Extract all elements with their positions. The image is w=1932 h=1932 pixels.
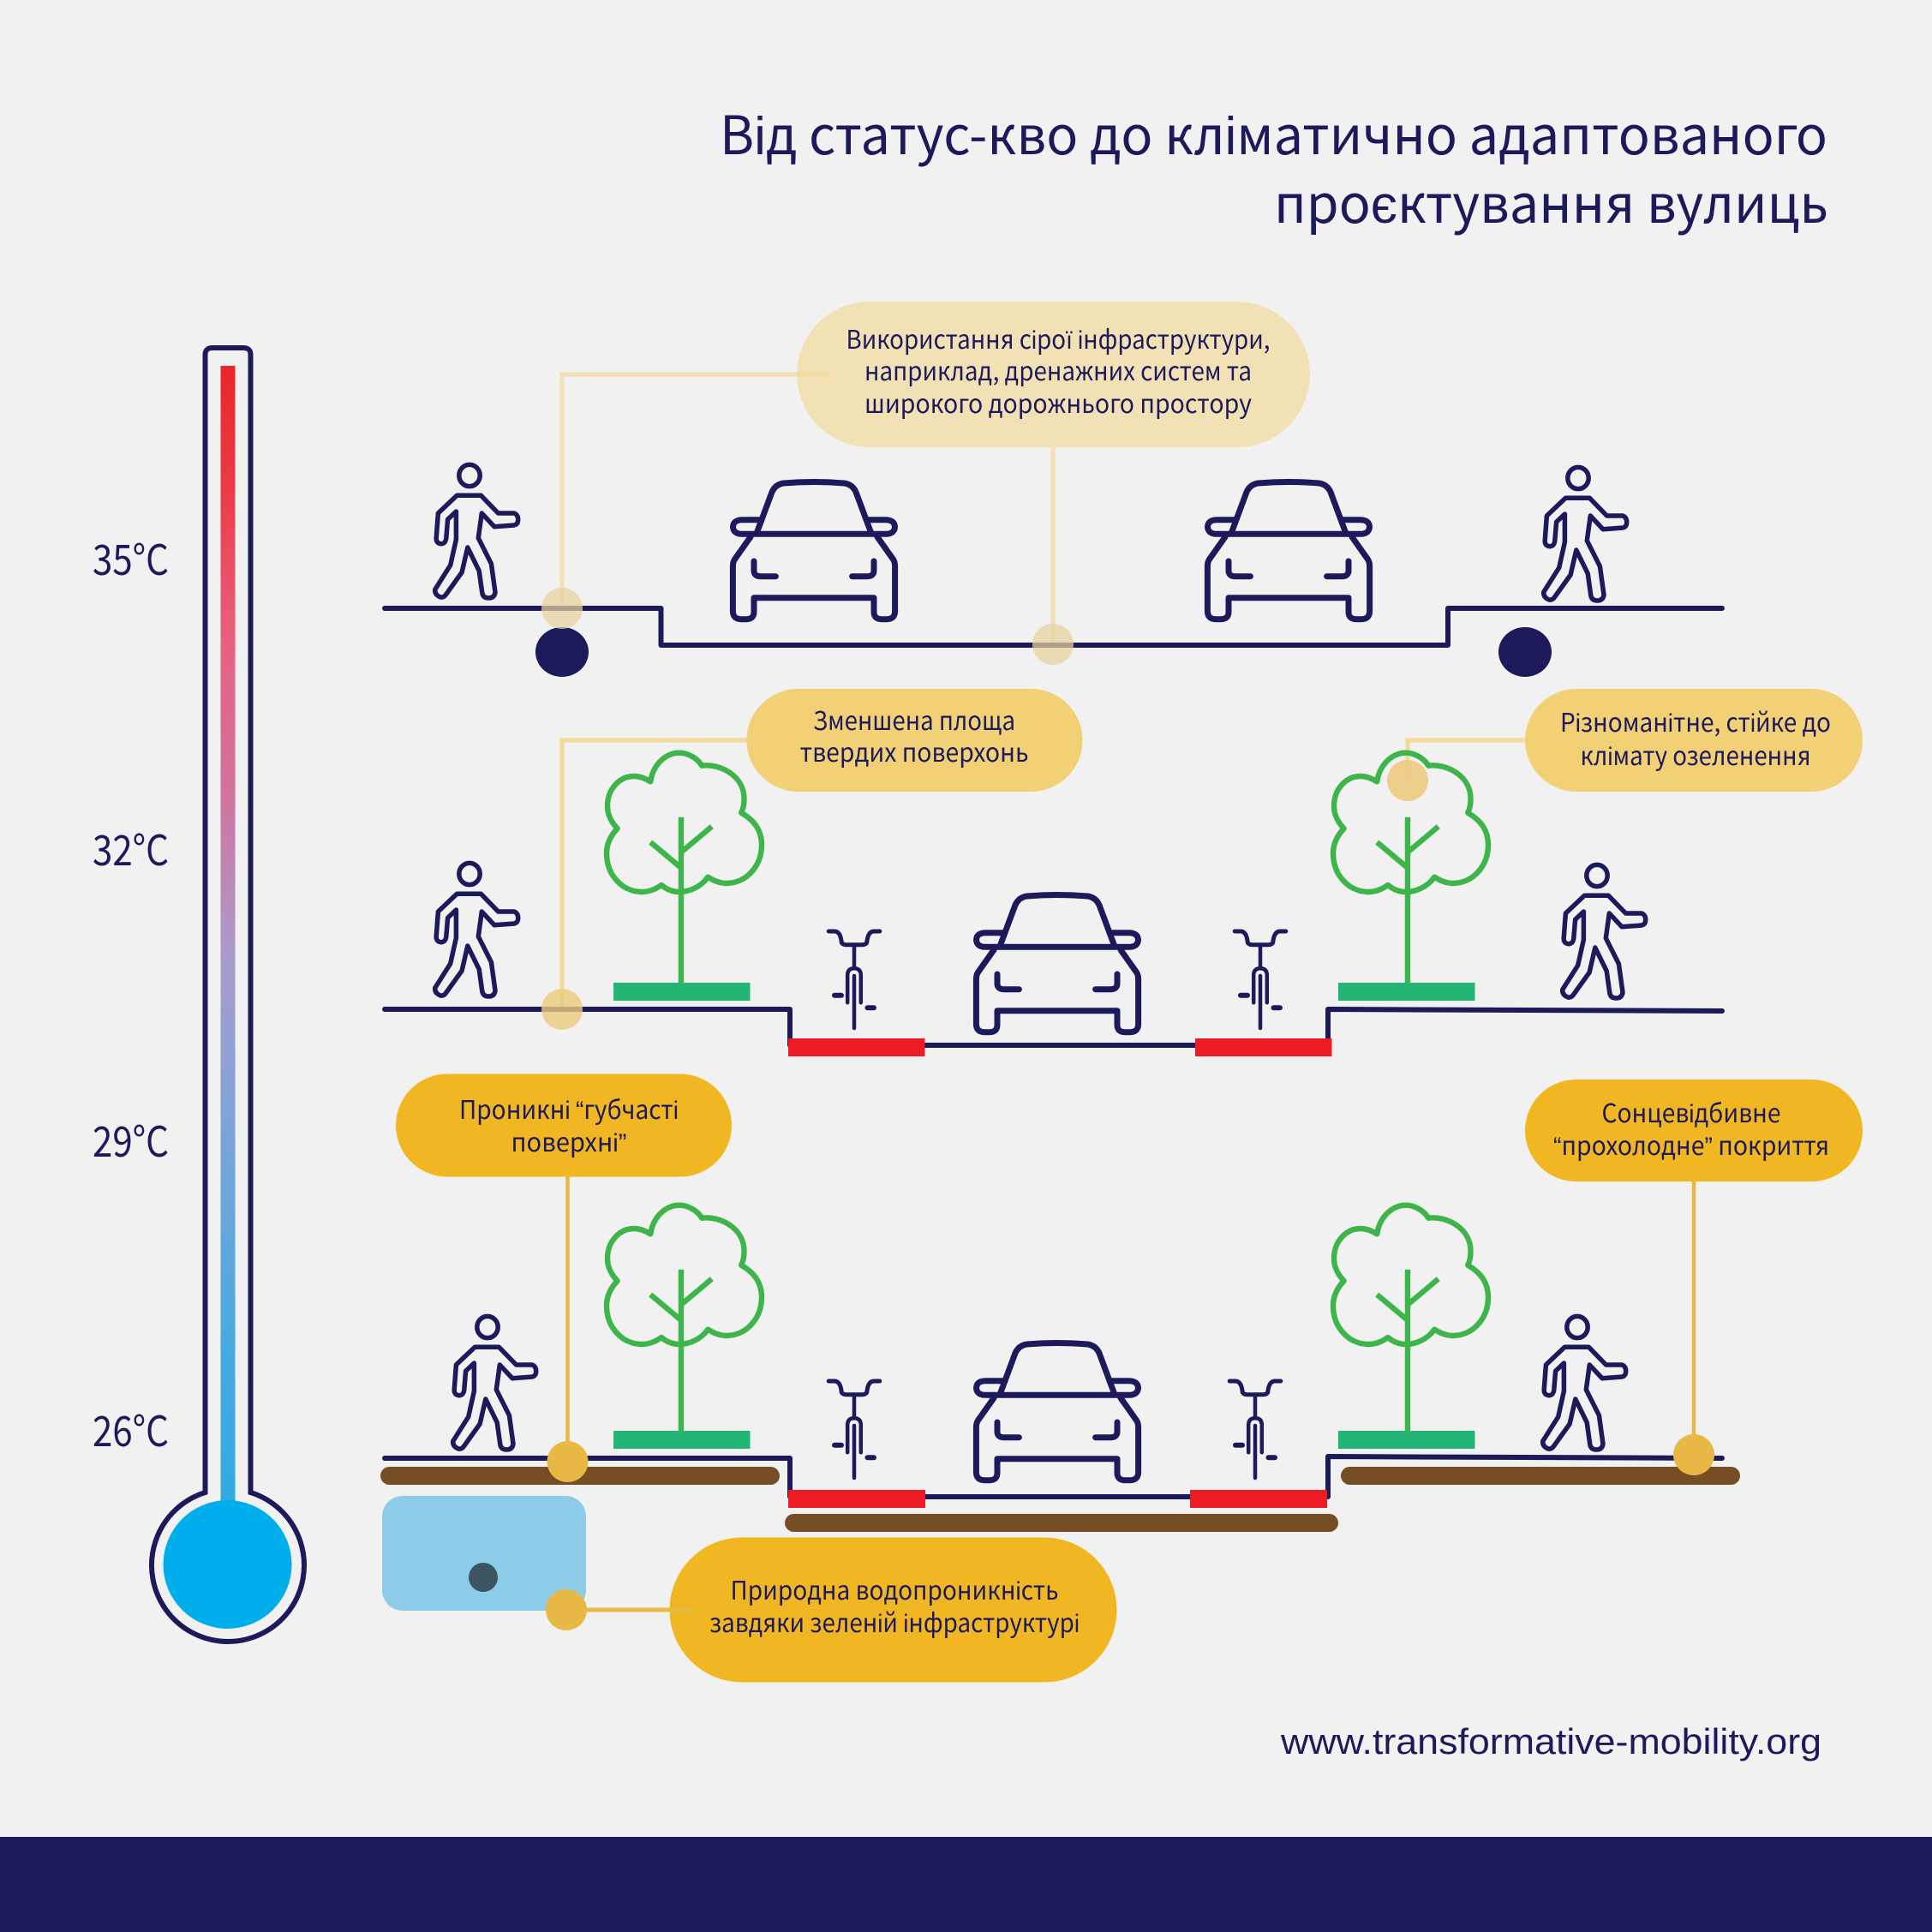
pedestrian left <box>453 1316 536 1450</box>
connector lines <box>562 374 1053 644</box>
tree left <box>607 1205 762 1436</box>
callout pill right <box>1525 689 1863 792</box>
marker dot cool surface <box>1673 1434 1714 1475</box>
pedestrian right <box>1544 467 1627 601</box>
connector stub <box>797 372 829 377</box>
marker dot tree <box>1387 760 1428 801</box>
mercury bulb <box>163 1500 291 1629</box>
pedestrian right <box>1543 1316 1626 1450</box>
marker dot road <box>1032 624 1074 665</box>
bike left <box>828 1381 880 1478</box>
street 1: grey infrastructure <box>385 302 1722 677</box>
callout text right: клімату озеленення <box>1580 735 1811 773</box>
drain left <box>535 627 589 677</box>
marker dot water <box>546 1589 587 1630</box>
marker dot pavement <box>541 989 583 1030</box>
road profile <box>385 1009 1722 1045</box>
pedestrian left <box>435 863 518 996</box>
callout text left: твердих поверхонь <box>800 732 1028 769</box>
tree right <box>1333 1205 1488 1436</box>
callout text cool surface: “прохолодне” покриття <box>1553 1125 1829 1163</box>
callout text water: завдяки зеленій інфраструктурі <box>709 1602 1080 1640</box>
bike lane right <box>1190 1490 1327 1508</box>
tree right <box>1333 753 1488 984</box>
connector lines <box>562 740 1525 1009</box>
water connector <box>566 1607 696 1612</box>
temperature scale: 26°C <box>93 1398 169 1459</box>
planter right <box>1338 1431 1475 1449</box>
planter left <box>613 983 751 1001</box>
website url: www.transformative-mobility.org <box>1280 1721 1821 1762</box>
bike right <box>1235 931 1286 1028</box>
pedestrian right <box>1563 864 1646 998</box>
callout pill <box>797 302 1310 447</box>
road profile <box>385 608 1722 645</box>
callout text right: Різноманітне, стійке до <box>1560 702 1831 739</box>
car <box>976 1343 1139 1480</box>
callout text sponge <box>459 1089 679 1159</box>
bike lane left <box>788 1490 925 1508</box>
car left <box>733 482 895 619</box>
drain pipe <box>469 1563 498 1592</box>
thermometer outline <box>152 348 304 1642</box>
callout pill water <box>670 1537 1117 1683</box>
callout text water <box>709 1570 1080 1640</box>
bike left <box>828 931 880 1028</box>
tree left <box>607 753 762 984</box>
callout text right <box>1560 702 1831 773</box>
permeable soil middle <box>785 1514 1338 1532</box>
street 3: sponge and cool surfaces <box>380 1074 1863 1683</box>
connector lines <box>567 1176 1694 1462</box>
planter left <box>613 1431 751 1449</box>
permeable soil right <box>1341 1467 1740 1485</box>
connector stub <box>669 1607 696 1612</box>
callout text left: Зменшена площа <box>813 700 1015 738</box>
water retention tank <box>382 1496 586 1611</box>
temperature scale: 35°C <box>93 527 169 588</box>
mercury column <box>221 366 235 1505</box>
bike lane right <box>1195 1038 1331 1056</box>
footer bar <box>0 1837 1932 1932</box>
temperature scale: 32°C <box>93 817 169 878</box>
callout text: Використання сірої інфраструктури, <box>846 319 1270 356</box>
car <box>976 894 1139 1032</box>
callout text sponge: Проникні “губчасті <box>459 1089 679 1127</box>
bike lane left <box>788 1038 925 1056</box>
callout text: широкого дорожнього простору <box>864 383 1252 421</box>
callout pill cool surface <box>1525 1080 1863 1181</box>
planter right <box>1338 983 1475 1001</box>
permeable soil left <box>380 1467 780 1485</box>
temperature scale: 29°C <box>93 1109 169 1169</box>
car right <box>1207 482 1370 619</box>
thermometer <box>152 348 304 1642</box>
street 2: reduced hard surfaces <box>385 689 1863 1056</box>
bike right <box>1229 1381 1281 1478</box>
temperature scale <box>93 527 169 1459</box>
title <box>720 93 1828 238</box>
title: Від статус-кво до кліматично адаптованого <box>720 93 1827 170</box>
callout text cool surface: Сонцевідбивне <box>1602 1092 1780 1130</box>
pedestrian left <box>435 464 518 598</box>
callout text cool surface <box>1553 1092 1829 1163</box>
callout pill left <box>747 689 1083 792</box>
marker dot sponge surface <box>547 1441 588 1482</box>
title: проєктування вулиць <box>1274 161 1828 238</box>
callout text sponge: поверхні” <box>511 1122 627 1159</box>
marker dot pavement <box>541 588 583 629</box>
road profile <box>385 1456 1722 1497</box>
callout text left <box>800 700 1028 769</box>
drain right <box>1498 627 1552 677</box>
callout text <box>846 319 1270 421</box>
callout pill sponge <box>396 1074 732 1177</box>
callout text water: Природна водопроникність <box>730 1570 1059 1607</box>
callout text: наприклад, дренажних систем та <box>864 350 1252 388</box>
